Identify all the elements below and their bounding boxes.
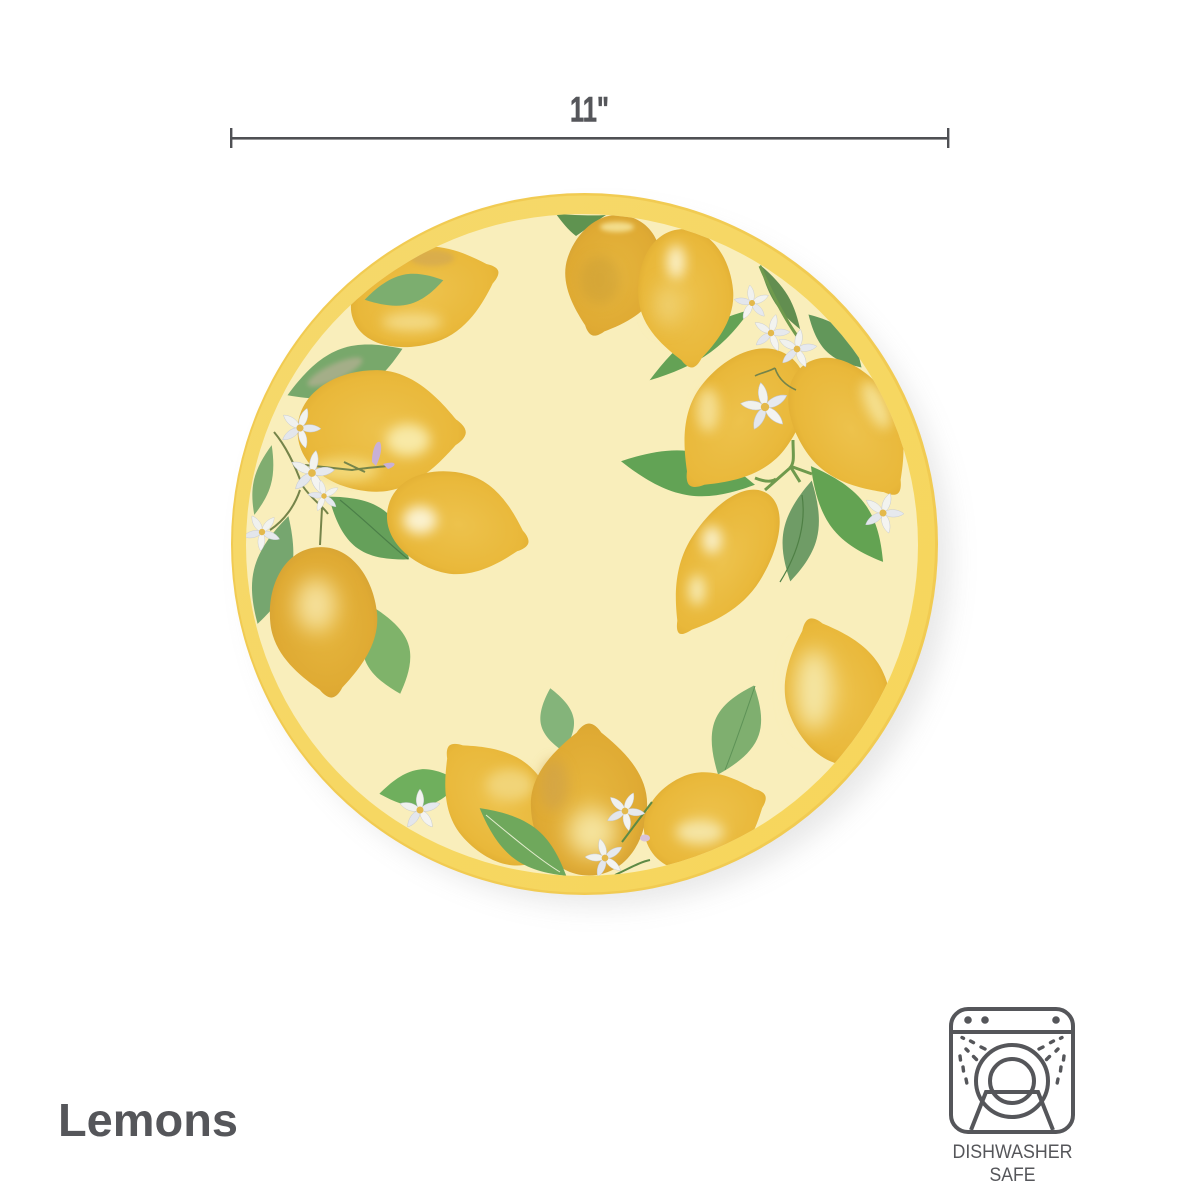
leaf: on top left lemon [364, 274, 444, 306]
icon caption: DISHWASHER [952, 1142, 1072, 1163]
cluster: top right [556, 214, 904, 634]
branch stems [270, 432, 388, 545]
lemon artwork [236, 202, 938, 890]
cluster: bottom [380, 686, 766, 876]
leaf: upper right [808, 314, 862, 368]
leaf: right lower [810, 466, 884, 562]
cluster: top left lemon [350, 246, 498, 348]
leaf: rim branch [760, 264, 800, 329]
flowers [282, 408, 321, 448]
leaf: under top lemon [650, 312, 744, 380]
lemon: lower right [784, 618, 888, 763]
leaf: top [556, 214, 606, 236]
lemon: bottom left [445, 744, 538, 866]
dimension line: 11 inch [230, 128, 949, 148]
plate well [246, 214, 918, 876]
flowers [734, 285, 768, 319]
lemon: top left [350, 246, 498, 348]
leaf: front [468, 794, 578, 890]
plate shadow [250, 215, 950, 905]
plate rim [231, 193, 938, 895]
cluster: left branch [246, 344, 528, 698]
lemon: right main [684, 348, 800, 487]
icon caption [952, 1142, 1072, 1186]
leaf: upper left [288, 344, 402, 398]
icon caption: SAFE [990, 1165, 1036, 1186]
lemon: middle left [386, 471, 528, 574]
leaf: top centre [540, 688, 574, 748]
leaf: rim edge [252, 445, 274, 515]
product name: Lemons [58, 1094, 238, 1146]
flower buds [372, 442, 395, 469]
plate [231, 193, 950, 905]
lemon: bottom right [644, 772, 766, 866]
leaf: right of lower lemon [364, 609, 410, 694]
lemon: large left [296, 369, 467, 493]
dimension label: 11" [570, 90, 609, 130]
leaf: hanging centre [782, 480, 819, 582]
icon: dishwasher safe [951, 1009, 1073, 1132]
lemon: far right [788, 358, 904, 495]
flowers [399, 789, 441, 829]
leaf: left of right lemon [621, 450, 755, 496]
lemon: hanging [676, 490, 780, 634]
stems [755, 266, 812, 490]
flower bud [640, 834, 650, 842]
lemon: top front [640, 229, 734, 368]
lemon: lower left [270, 547, 378, 698]
leaf: beside flowers [252, 516, 294, 624]
leaf: bottom far left [380, 769, 446, 806]
stems [615, 802, 652, 875]
lemon: bottom middle [531, 724, 647, 876]
leaf: top right [712, 686, 762, 774]
leaf: below left lemon [328, 496, 410, 560]
lemon: top back [565, 216, 656, 336]
